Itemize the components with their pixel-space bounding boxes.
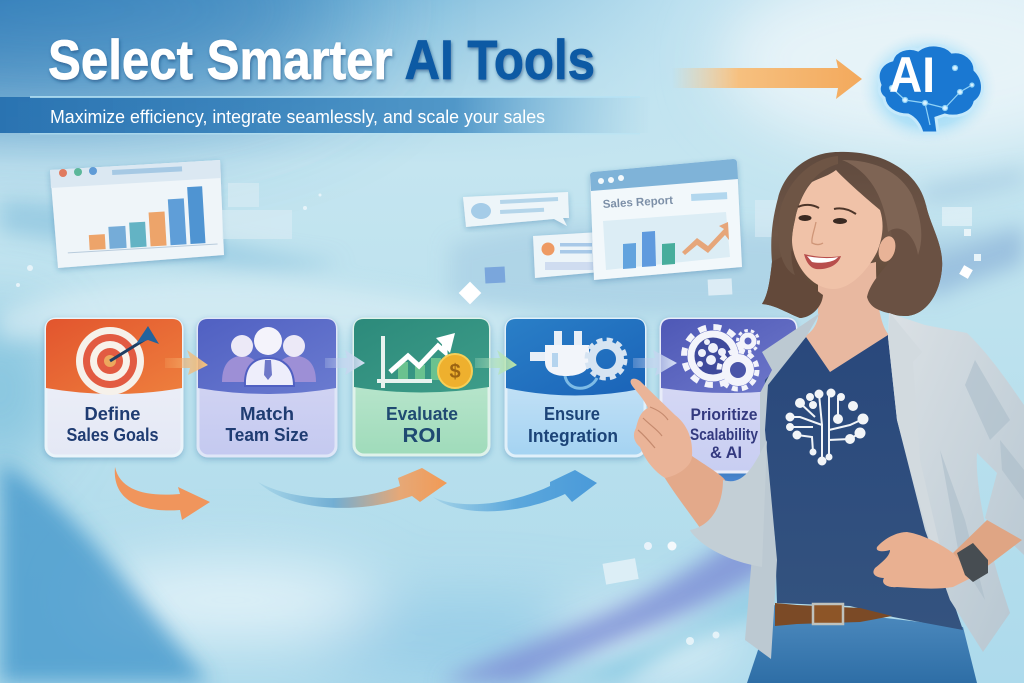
label: Prioritize — [690, 405, 758, 424]
arrow: to AI brain — [672, 59, 862, 99]
smartwatch — [957, 543, 988, 582]
step card: define sales goals — [46, 319, 182, 456]
jacket left panel — [745, 313, 820, 659]
arrow: step 4 to 5 — [633, 350, 677, 376]
pointing hand — [631, 379, 692, 478]
left hair strand — [778, 156, 838, 275]
subtitle band — [0, 96, 650, 134]
t-shirt — [763, 335, 963, 630]
icon: AI brain: AI — [889, 47, 935, 103]
label: Scalability — [690, 425, 758, 444]
ear — [876, 234, 898, 264]
decorative squares and diamonds — [16, 194, 981, 645]
hand on hip — [873, 532, 973, 589]
step card: ensure integration — [506, 319, 645, 456]
left sleeve — [690, 440, 767, 567]
icon: team of three — [222, 327, 316, 386]
icon: plug and gear — [530, 331, 625, 388]
jacket mottling — [940, 360, 1024, 600]
arrow: step 2 to 3 — [325, 350, 365, 375]
label: & AI — [710, 443, 742, 462]
panel: chat card — [533, 232, 600, 278]
neck — [804, 262, 889, 374]
curved arrow: blue to orange — [258, 468, 447, 508]
step card: match team size — [198, 319, 336, 456]
label: Evaluate — [386, 403, 458, 424]
icon: AI brain — [860, 32, 996, 144]
woman presenter — [631, 152, 1024, 683]
subtitle: Maximize efficiency, integrate seamlessly, and scale your sales — [50, 107, 545, 127]
decorative cards near chart — [222, 183, 972, 239]
label: ROI — [402, 425, 442, 447]
curved arrow: orange — [115, 467, 210, 520]
jeans — [747, 605, 977, 683]
step card: evaluate roi — [354, 319, 489, 455]
left forearm — [663, 456, 725, 535]
icon: gears — [684, 327, 758, 389]
icon: growth chart and coin: $ — [449, 361, 461, 383]
smile — [804, 254, 841, 269]
label: Sales Goals — [66, 424, 158, 445]
shirt circuit logo — [786, 390, 868, 464]
label: Define — [84, 403, 140, 424]
belt — [775, 603, 892, 626]
jacket right panel — [888, 313, 1024, 652]
arrow: step 1 to 2 — [165, 350, 208, 375]
curved arrow: blue — [433, 470, 597, 511]
eyes and brows — [798, 205, 856, 244]
right hair highlight — [842, 160, 921, 255]
panel: chat bubble — [463, 192, 569, 227]
panel: top-left chart window — [50, 160, 224, 268]
arrow: step 3 to 4 — [475, 350, 517, 375]
face — [792, 170, 883, 289]
step card: prioritize scalability and ai — [661, 319, 796, 488]
lower right hair — [867, 205, 942, 316]
label: Match — [240, 403, 294, 424]
lower left hair — [762, 250, 823, 318]
heading: sales report: Sales Report — [602, 195, 674, 211]
label: Ensure — [544, 403, 600, 424]
icon: target with dart — [76, 326, 159, 395]
label: Team Size — [226, 424, 308, 445]
label: Integration — [528, 425, 618, 446]
title: Select Smarter AI Tools — [48, 28, 595, 91]
right forearm — [953, 520, 1022, 577]
panel: sales report window — [590, 159, 742, 280]
hair — [762, 152, 942, 318]
